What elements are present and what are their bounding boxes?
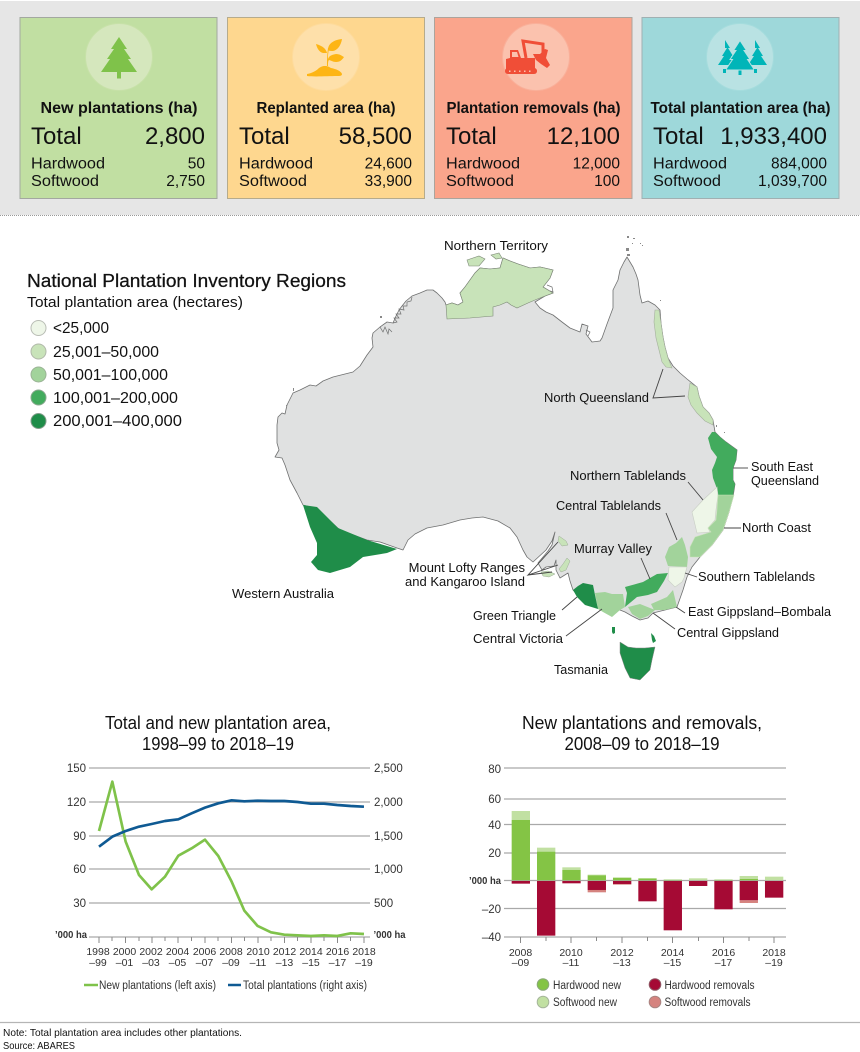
left axis: ’000 ha xyxy=(55,929,87,941)
map legend: 50,001–100,000 xyxy=(53,367,168,384)
x labels: 2006 xyxy=(193,946,216,958)
region: Northern Territory xyxy=(446,258,553,319)
map labels and leaders xyxy=(232,238,832,677)
x labels: 2018 xyxy=(352,946,376,958)
panel: new plantations: Hardwood xyxy=(31,156,105,172)
heading: replanted area: Replanted area (ha) xyxy=(256,100,396,117)
x labels xyxy=(86,946,376,969)
panel: total plantation area: 1,933,400 xyxy=(720,123,827,150)
x labels: –03 xyxy=(142,957,160,969)
x labels: –07 xyxy=(196,957,213,969)
y axis labels: 60 xyxy=(488,794,501,806)
x labels: –17 xyxy=(329,957,346,969)
x labels: 2012 xyxy=(610,947,634,959)
legend title: National Plantation Inventory Regions xyxy=(27,271,346,291)
x labels: 2014 xyxy=(299,946,323,958)
right axis: 1,500 xyxy=(374,831,403,843)
series: new plantations xyxy=(99,782,364,936)
region: Green Triangle xyxy=(573,583,598,609)
map labels and leaders: East Gippsland–Bombala xyxy=(688,604,832,619)
y axis labels: 40 xyxy=(488,820,501,832)
x labels: –17 xyxy=(715,957,732,969)
x labels: –05 xyxy=(169,957,186,969)
panel: replanted area: Softwood xyxy=(239,173,307,190)
panel: plantation removals xyxy=(434,18,632,198)
x labels: 2004 xyxy=(166,946,189,958)
note and source: Source: ABARES xyxy=(3,1040,75,1052)
panel: replanted area xyxy=(228,18,424,198)
region: Central Tablelands xyxy=(665,537,688,567)
map labels and leaders: Tasmania xyxy=(554,662,609,677)
panel: new plantations: 2,800 xyxy=(145,123,205,150)
x labels: 2002 xyxy=(139,946,163,958)
x labels: 2000 xyxy=(113,946,136,958)
region: Murray Valley xyxy=(625,573,668,607)
heading: total plantation area: Total plantation area (ha) xyxy=(650,100,830,117)
panel: total plantation area: Softwood xyxy=(653,173,721,190)
panel: new plantations xyxy=(20,18,217,198)
icon: seedling xyxy=(307,39,344,76)
x labels: –01 xyxy=(116,957,133,969)
x labels: 2010 xyxy=(559,947,583,959)
panel: total plantation area: 884,000 xyxy=(771,156,827,172)
x labels: –11 xyxy=(250,957,267,969)
panel: new plantations: 2,750 xyxy=(166,173,205,190)
legend: bar chart: Hardwood removals xyxy=(664,980,755,992)
region: Tasmania xyxy=(620,642,655,680)
chart title: total and new plantation area: Total and new plantation area, xyxy=(105,713,331,733)
map legend: 200,001–400,000 xyxy=(53,413,182,430)
panel: plantation removals: Softwood xyxy=(446,173,514,190)
x labels: 2016 xyxy=(326,946,349,958)
panel: new plantations: 50 xyxy=(188,156,205,172)
right axis: ’000 ha xyxy=(374,929,406,941)
y axis labels: –40 xyxy=(482,932,501,944)
x labels: 2012 xyxy=(273,946,296,958)
panel: replanted area: 58,500 xyxy=(339,123,412,150)
chart title: new plantations and removals xyxy=(522,713,762,754)
x labels: 1998 xyxy=(86,946,110,958)
x labels: –09 xyxy=(222,957,240,969)
x labels: 2010 xyxy=(246,946,270,958)
chart title: new plantations and removals: 2008–09 to 2018–19 xyxy=(564,734,720,754)
left axis: 90 xyxy=(73,831,86,843)
y axis labels: 80 xyxy=(488,764,501,776)
right axis: 1,000 xyxy=(374,864,403,876)
map labels and leaders: Northern Tablelands xyxy=(570,468,686,483)
x labels: 2014 xyxy=(661,947,684,959)
map labels and leaders: North Queensland xyxy=(544,390,649,405)
chart title: total and new plantation area: 1998–99 to 2018–19 xyxy=(142,734,294,754)
panel: plantation removals: 100 xyxy=(594,173,620,190)
region: North Coast xyxy=(690,495,734,557)
heading: new plantations: New plantations (ha) xyxy=(40,100,198,117)
label: Northern Territory: Northern Territory xyxy=(444,238,549,253)
x labels: –19 xyxy=(765,957,783,969)
region: Northern Tablelands xyxy=(692,487,718,533)
x axis ticks xyxy=(520,937,774,943)
map legend: Total plantation area (hectares) xyxy=(27,294,243,311)
line chart: total and new plantation area xyxy=(55,763,406,992)
right axis xyxy=(374,763,406,941)
map legend: <25,000 xyxy=(53,320,109,337)
map labels and leaders: Mount Lofty Ranges xyxy=(409,560,525,575)
panel: plantation removals: Total xyxy=(446,123,497,150)
x ticks xyxy=(99,937,364,943)
chart title: new plantations and removals: New plantations and removals, xyxy=(522,713,762,733)
grid lines xyxy=(89,768,370,937)
map labels and leaders: Murray Valley xyxy=(574,541,652,556)
x labels: –11 xyxy=(563,957,580,969)
x labels: –13 xyxy=(613,957,631,969)
region: Southern Tablelands xyxy=(668,567,687,587)
y axis labels xyxy=(469,764,501,944)
icon: harvester xyxy=(505,41,550,74)
y axis labels: ’000 ha xyxy=(469,875,501,887)
x labels: –09 xyxy=(512,957,529,969)
grid lines xyxy=(504,768,786,937)
panel: total plantation area xyxy=(642,18,839,198)
map labels and leaders: South East xyxy=(751,459,813,474)
jagged Kimberley and Top End coast detail xyxy=(380,270,590,336)
panel: new plantations: Total xyxy=(31,123,82,150)
note and source: Note: Total plantation area includes other plantations. xyxy=(3,1027,242,1039)
left axis xyxy=(55,763,87,941)
legend: line chart: Total plantations (right axis) xyxy=(243,980,367,992)
bar chart: new plantations and removals xyxy=(469,764,786,1009)
note and source xyxy=(3,1027,242,1052)
panel: plantation removals: Hardwood xyxy=(446,156,520,172)
x labels: 2016 xyxy=(712,947,735,959)
right axis: 2,500 xyxy=(374,763,403,775)
legend: line chart xyxy=(84,980,367,992)
left axis: 150 xyxy=(67,763,86,775)
x labels xyxy=(509,947,786,969)
region: Central Gippsland xyxy=(628,604,655,619)
icon: pine tree xyxy=(101,37,137,78)
legend: bar chart xyxy=(537,979,755,1009)
panel: plantation removals: 12,000 xyxy=(573,156,620,172)
x labels: –99 xyxy=(89,957,107,969)
panel: total plantation area: Total xyxy=(653,123,704,150)
left axis: 60 xyxy=(73,864,86,876)
left axis: 120 xyxy=(67,797,86,809)
bars xyxy=(512,811,783,936)
y axis labels: –20 xyxy=(482,904,501,916)
panel: replanted area: 24,600 xyxy=(365,156,412,172)
series: total plantations xyxy=(99,800,364,847)
legend: bar chart: Softwood removals xyxy=(664,997,751,1009)
right axis: 500 xyxy=(374,898,393,910)
map labels and leaders: Central Victoria xyxy=(473,631,564,646)
panel: total plantation area: 1,039,700 xyxy=(758,173,827,190)
panel: replanted area: 33,900 xyxy=(365,173,412,190)
x labels: 2008 xyxy=(509,947,532,959)
region: East Gippsland-Bombala xyxy=(651,590,677,610)
map labels and leaders: Southern Tablelands xyxy=(698,569,815,584)
panel: new plantations: Softwood xyxy=(31,173,99,190)
map labels and leaders: North Coast xyxy=(742,520,811,535)
panel: total plantation area: Hardwood xyxy=(653,156,727,172)
map legend xyxy=(27,271,346,430)
map labels and leaders: Queensland xyxy=(751,473,819,488)
region: Central Victoria xyxy=(595,592,625,617)
x labels: –19 xyxy=(355,957,373,969)
map labels and leaders: Western Australia xyxy=(232,586,335,601)
map legend: 25,001–50,000 xyxy=(53,344,159,361)
panel: replanted area: Hardwood xyxy=(239,156,313,172)
region: Western Australia xyxy=(303,505,397,573)
x labels: –15 xyxy=(302,957,320,969)
region: Mount Lofty Ranges and Kangaroo Island xyxy=(541,536,570,577)
map labels and leaders: Green Triangle xyxy=(473,608,556,623)
icon: forest xyxy=(718,40,767,75)
offshore islands xyxy=(286,236,725,433)
region: South East Queensland xyxy=(708,432,737,495)
panel: plantation removals: 12,100 xyxy=(547,123,620,150)
x labels: –13 xyxy=(276,957,293,969)
right axis: 2,000 xyxy=(374,797,403,809)
map labels and leaders: Central Tablelands xyxy=(556,498,661,513)
map labels and leaders: and Kangaroo Island xyxy=(405,574,525,589)
map legend: 100,001–200,000 xyxy=(53,390,178,407)
legend: bar chart: Hardwood new xyxy=(553,980,622,992)
x labels: 2018 xyxy=(762,947,786,959)
legend: line chart: New plantations (left axis) xyxy=(99,980,216,992)
summary band background xyxy=(0,1,860,215)
region: North Queensland xyxy=(654,310,713,425)
legend: bar chart: Softwood new xyxy=(553,997,618,1009)
map labels and leaders: Central Gippsland xyxy=(677,625,779,640)
King and Flinders islands xyxy=(612,627,656,643)
x labels: 2008 xyxy=(219,946,243,958)
left axis: 30 xyxy=(73,898,86,910)
map of Australia xyxy=(275,236,737,680)
y axis labels: 20 xyxy=(488,848,501,860)
chart title: total and new plantation area xyxy=(105,713,331,754)
x labels: –15 xyxy=(664,957,681,969)
panel: replanted area: Total xyxy=(239,123,290,150)
mainland xyxy=(275,257,737,620)
heading: plantation removals: Plantation removals (ha) xyxy=(446,100,620,117)
